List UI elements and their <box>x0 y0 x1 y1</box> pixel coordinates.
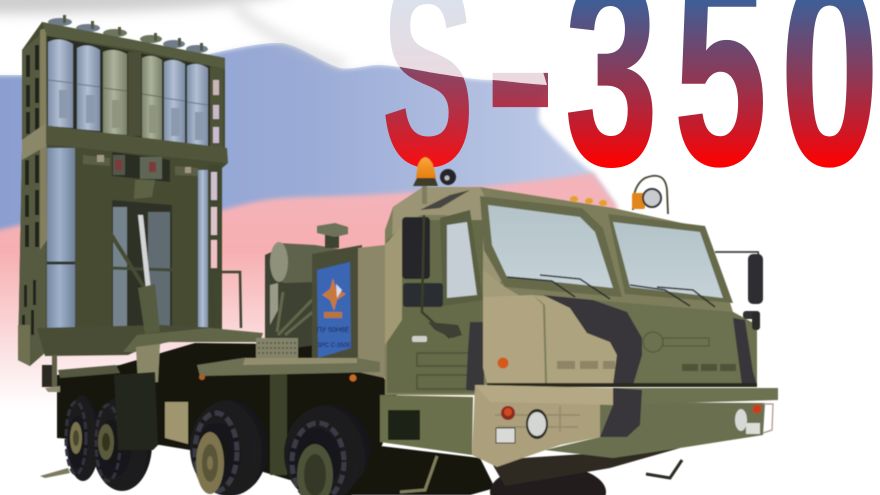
hood vents left <box>557 361 615 369</box>
wheel 3 <box>190 400 268 495</box>
black mirror lower <box>403 283 443 307</box>
windshield left frame <box>480 196 622 297</box>
deck highlight <box>243 358 357 365</box>
orange marker <box>350 374 356 382</box>
top beam <box>42 22 225 69</box>
rear deck rail <box>58 365 120 378</box>
lower left missile tube <box>47 148 75 330</box>
generator frame <box>265 250 316 352</box>
flag fold shadow <box>235 5 345 66</box>
wipers <box>507 275 715 307</box>
centre post <box>128 52 141 136</box>
placard text: ПУ 50Н6Е <box>317 327 350 334</box>
upper missile tube 4 <box>142 56 162 140</box>
mid beam edge <box>22 123 46 160</box>
upper missile tube 3 <box>103 50 127 135</box>
cab shell <box>385 187 757 395</box>
flag: white band over the title <box>0 0 547 85</box>
bumper lower tan <box>472 385 600 467</box>
sensor recesses <box>112 152 170 182</box>
battery box <box>165 402 188 444</box>
wheel 4 <box>284 405 372 495</box>
left frame slots <box>22 45 39 337</box>
flag: blue band <box>0 43 617 240</box>
front wheel <box>490 465 606 495</box>
left frame tan edge <box>40 28 47 250</box>
lower cross beam <box>37 325 222 356</box>
bumper shadow line <box>487 383 757 387</box>
hood centre olive <box>533 295 757 385</box>
mirror arm <box>422 215 450 338</box>
bumper top bar tan <box>475 385 613 405</box>
bumper camo <box>600 388 642 437</box>
rear mudguard <box>114 372 158 450</box>
launcher <box>18 15 228 366</box>
left side ladder frame <box>18 30 46 366</box>
hoses <box>277 292 315 335</box>
orange side lamp <box>498 358 508 368</box>
title: S-350 <box>382 0 879 222</box>
hood emblem <box>643 332 709 352</box>
orange marker rear <box>199 374 205 380</box>
mesh step <box>256 338 298 358</box>
tan below left windshield <box>483 270 520 297</box>
dark camo band <box>543 295 642 385</box>
beacon <box>413 157 438 204</box>
lower panel window <box>112 200 172 330</box>
black mirror upper <box>402 217 430 279</box>
windshield right frame <box>608 214 733 303</box>
left windshield <box>488 205 613 288</box>
tow step <box>646 460 682 478</box>
horn <box>440 169 456 185</box>
upper missile tube 5 <box>164 60 185 143</box>
handrail <box>211 272 241 334</box>
deck sky gap <box>270 283 278 325</box>
flag top shading <box>0 0 300 14</box>
jack under launcher <box>42 355 60 392</box>
cab rear column <box>358 245 385 378</box>
door side tan <box>385 225 402 345</box>
door camo <box>466 322 484 392</box>
missile caps <box>48 15 208 53</box>
side step panel <box>380 395 473 455</box>
upper missile tube 1 <box>48 39 73 128</box>
step bracket <box>400 456 437 492</box>
placard emblem <box>322 278 346 318</box>
upper missile tube 2 <box>77 45 100 131</box>
mid beam <box>43 125 228 163</box>
door window <box>447 222 477 298</box>
spotlight <box>632 176 668 214</box>
panel frame <box>312 245 362 365</box>
door window frame <box>440 210 483 306</box>
placard text 2: ЗРС С-350Е <box>317 343 351 349</box>
flag: red band <box>0 173 640 420</box>
bumper top bar olive <box>613 388 778 405</box>
upper missile tube 6 <box>187 64 208 146</box>
door bracket <box>428 322 462 338</box>
launcher silhouette <box>18 22 228 366</box>
hood vents right <box>682 364 736 371</box>
front axle shadow <box>345 445 495 495</box>
wheel 2 <box>92 397 152 491</box>
bracket on panel <box>134 180 155 199</box>
chassis mast <box>270 372 287 475</box>
cab <box>380 187 778 486</box>
lower central panel column <box>78 143 200 345</box>
bumper underside <box>490 448 680 486</box>
upper rack dark backing <box>47 36 210 148</box>
tan box on chassis <box>136 344 160 384</box>
blue placard <box>317 262 351 358</box>
hood side tan <box>483 295 545 383</box>
lower right tube <box>198 170 208 330</box>
door lower panels <box>417 353 474 389</box>
dark chassis <box>57 343 400 480</box>
wheel 1 <box>66 395 100 481</box>
lower right ladder <box>208 165 222 330</box>
right side upper ladder <box>210 68 223 148</box>
door handle <box>412 336 427 342</box>
small side lugs <box>83 155 198 176</box>
rear platform <box>123 328 263 352</box>
door <box>387 220 483 393</box>
right dark stripe <box>733 318 757 385</box>
cab roof camo tan <box>392 187 505 300</box>
left lamps group <box>495 406 580 443</box>
lift strut piston <box>138 215 160 334</box>
right mirror <box>715 252 763 330</box>
roof dark camo <box>420 190 470 210</box>
right lamps group <box>735 404 773 434</box>
hood centre tan <box>533 295 617 385</box>
generator cylinder <box>270 242 345 283</box>
main deck <box>197 358 380 376</box>
bumper lower olive <box>545 402 765 458</box>
generator stem and cap <box>317 223 348 248</box>
rear support foot <box>40 468 70 478</box>
launcher foot <box>18 325 30 366</box>
roof marker lights <box>570 196 607 206</box>
right windshield <box>613 222 723 298</box>
